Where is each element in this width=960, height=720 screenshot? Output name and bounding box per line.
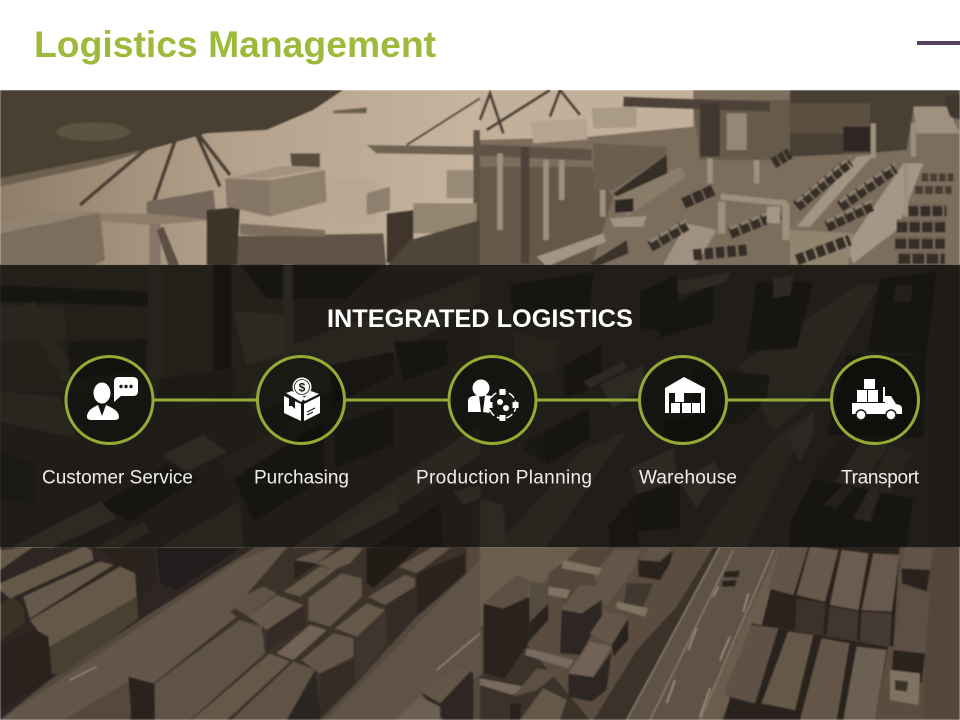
step: warehouse [639,356,737,488]
band area: containers and crane under the dark overlay [0,265,480,547]
label: purchasing: Purchasing [254,468,349,488]
step: purchasing [254,356,349,488]
icon: truck with boxes [852,379,902,420]
label: production planning: Production Planning [416,468,592,488]
top left: river, trees, crane [0,90,480,270]
label: customer service: Customer Service [42,468,193,488]
heading: integrated logistics: INTEGRATED LOGISTICS [327,305,633,333]
label: transport: Transport [841,468,920,488]
top right: cranes and yard [480,90,960,270]
step: production planning [416,356,592,488]
bottom left containers [0,540,480,720]
dark translucent band [0,265,960,547]
accent dash [917,41,960,45]
bottom right containers [480,540,960,720]
icon: warehouse [665,377,705,413]
right hand container rows [762,545,900,647]
process diagram [42,355,920,488]
step: transport [832,356,920,488]
icon: person with speech bubble [87,377,138,420]
step: customer service [42,356,193,488]
label: warehouse: Warehouse [639,468,737,488]
connector lines [153,398,832,402]
icon: box with dollar coin: $ [299,380,306,394]
icon: manager with gear cycle [468,380,518,421]
title: Logistics Management [34,23,436,65]
